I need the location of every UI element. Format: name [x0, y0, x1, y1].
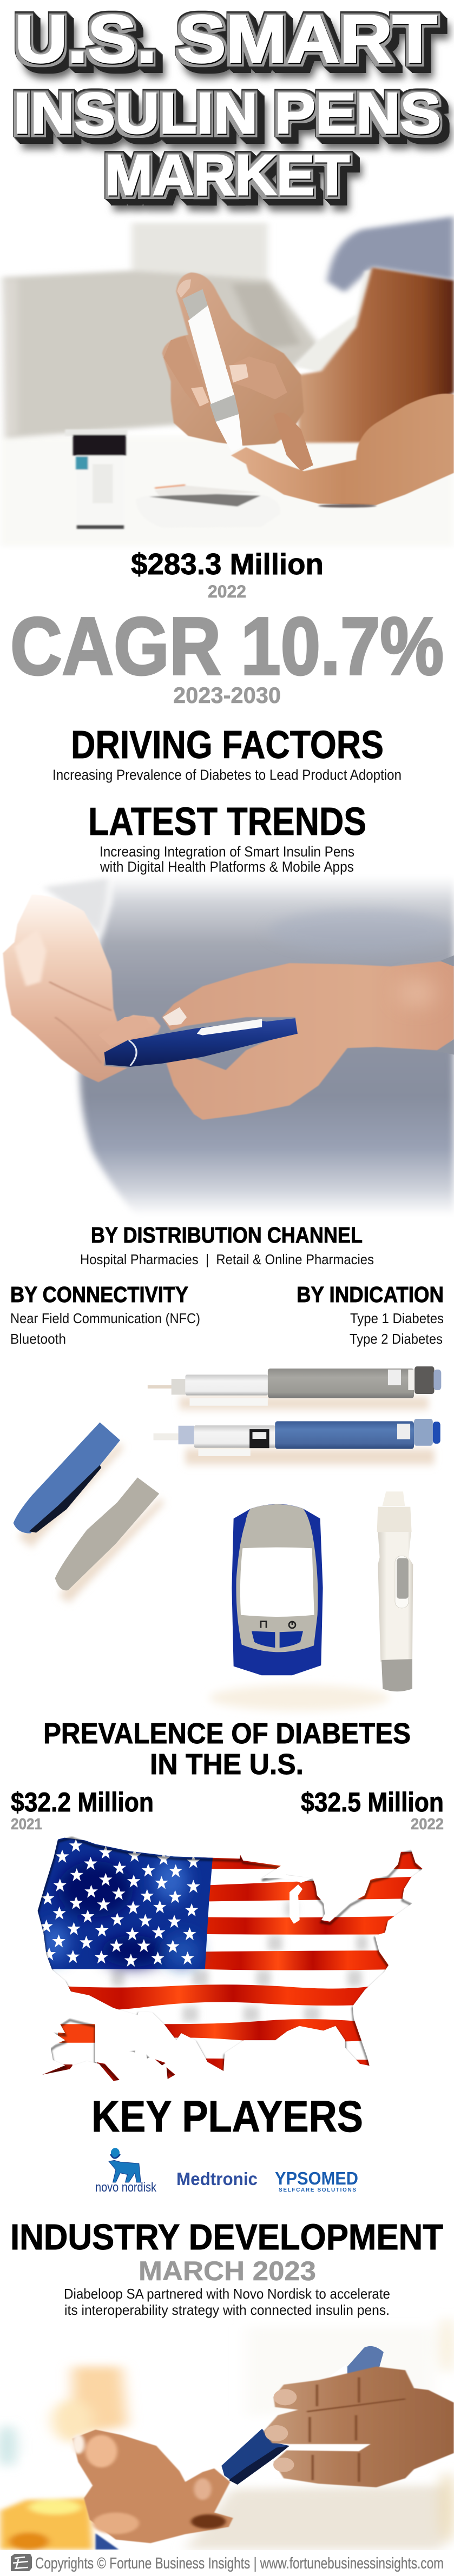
title line 1: U.S. SMART	[15, 2, 437, 77]
latest trends line 2: with Digital Health Platforms & Mobile Apps	[100, 859, 354, 875]
grey pen cap	[55, 1477, 159, 1590]
blue pen cap	[14, 1422, 120, 1533]
map: USA with flag fill	[29, 1833, 429, 2083]
blue insulin pen	[154, 1419, 440, 1456]
driving factors	[52, 723, 402, 783]
development text line 2: its interoperability strategy with connected insulin pens.	[64, 2302, 390, 2318]
blue pen lower	[221, 2429, 289, 2485]
lancing device	[182, 289, 242, 452]
novo nordisk bull	[109, 2148, 141, 2182]
latest trends	[88, 800, 366, 875]
forearm	[298, 268, 454, 443]
blue pen upper	[347, 2346, 384, 2375]
left hand	[3, 895, 161, 1082]
logo: Ypsomed	[275, 2168, 358, 2193]
meter buttons	[252, 1631, 303, 1648]
year 2022: 2022	[411, 1816, 444, 1833]
blue jeans	[96, 2533, 119, 2550]
test strip vial	[65, 429, 127, 529]
title	[14, 2, 441, 207]
driving factors text: Increasing Prevalence of Diabetes to Lead Product Adoption	[52, 767, 402, 783]
shirt tone right	[269, 909, 454, 953]
logo: novo nordisk	[95, 2148, 157, 2195]
prevalence line 1: PREVALENCE OF DIABETES	[43, 1717, 411, 1750]
prevalence 2021	[11, 1787, 154, 1833]
market value year: 2022	[208, 582, 246, 601]
flag stripes and canton	[29, 1833, 429, 2083]
connectivity item NFC: Near Field Communication (NFC)	[10, 1310, 200, 1326]
development text line 1: Diabeloop SA partnered with Novo Nordisk to accelerate	[64, 2286, 390, 2302]
left hand highlights	[72, 2434, 226, 2534]
lancing device	[377, 1491, 413, 1691]
left fingertip	[98, 1016, 150, 1046]
warm shadow	[209, 1685, 390, 1710]
footer	[11, 2554, 444, 2572]
distribution heading: BY DISTRIBUTION CHANNEL	[91, 1223, 363, 1247]
pen lower shade	[229, 2446, 289, 2485]
Ypsomed name: YPSOMED	[275, 2168, 358, 2188]
thumbnail	[163, 1007, 187, 1026]
meter screen	[240, 1548, 314, 1617]
key players heading: KEY PLAYERS	[91, 2092, 363, 2141]
photo: hands holding blue insulin pen	[3, 872, 454, 1216]
CAGR period: 2023-2030	[173, 682, 281, 708]
product photo: pens and caps	[14, 1366, 441, 1602]
upper hand	[162, 273, 304, 446]
Ypsomed tagline: SELFCARE SOLUTIONS	[279, 2187, 356, 2193]
right cuff	[437, 955, 454, 1054]
year 2021: 2021	[11, 1816, 42, 1833]
logo: Medtronic: Medtronic	[176, 2169, 258, 2189]
raised finger	[274, 413, 313, 471]
blurred background	[0, 2316, 454, 2550]
market value: $283.3 Million	[131, 547, 324, 581]
by indication	[297, 1282, 444, 1347]
distribution items: Hospital Pharmacies | Retail & Online Pharmacies	[80, 1251, 374, 1267]
title line 2: INSULIN PENS	[14, 81, 441, 145]
soft shadows	[17, 1397, 434, 1602]
finger creases	[307, 2378, 405, 2482]
market size 2022	[131, 547, 324, 601]
by connectivity	[10, 1282, 200, 1347]
wrist highlight	[399, 978, 434, 1008]
prevalence line 2: IN THE U.S.	[150, 1748, 304, 1781]
meter icons	[261, 1622, 295, 1628]
blue insulin pen	[104, 1018, 298, 1067]
latest trends heading: LATEST TRENDS	[88, 800, 366, 844]
fingers over device	[163, 280, 287, 410]
novo nordisk name: novo nordisk	[95, 2180, 157, 2195]
great lakes cut-outs	[262, 1867, 313, 1924]
CAGR	[10, 600, 444, 708]
left hand	[73, 2429, 233, 2543]
photo: hands using blue pen	[0, 2316, 454, 2551]
grey insulin pen	[148, 1366, 441, 1406]
grey shirt	[80, 872, 454, 1216]
hand shadow	[318, 504, 376, 508]
prevalence 2022	[301, 1787, 444, 1833]
white block	[24, 2456, 80, 2494]
right hand	[264, 2367, 454, 2487]
indication item type 2: Type 2 Diabetes	[350, 1331, 443, 1347]
table	[0, 436, 454, 546]
driving factors heading: DRIVING FACTORS	[71, 723, 384, 767]
white sleeve edge	[295, 271, 373, 373]
fingertips	[265, 2389, 297, 2472]
indication item type 1: Type 1 Diabetes	[350, 1310, 444, 1326]
connectivity item Bluetooth: Bluetooth	[10, 1331, 66, 1347]
palm crease	[49, 982, 111, 1064]
prevalence heading	[43, 1717, 411, 1781]
footer white band	[0, 2550, 454, 2576]
latest trends line 1: Increasing Integration of Smart Insulin Pens	[100, 844, 354, 860]
development date: MARCH 2023	[139, 2256, 316, 2286]
right arm and hand	[162, 961, 454, 1120]
title line 3: MARKET	[105, 143, 350, 207]
white pen section	[324, 2365, 348, 2381]
connectivity heading: BY CONNECTIVITY	[10, 1282, 188, 1307]
sofa backdrop	[2, 223, 318, 438]
value 2021: $32.2 Million	[11, 1787, 154, 1817]
by distribution channel	[80, 1223, 374, 1267]
shirt sleeve	[327, 216, 454, 293]
glucose meter	[232, 1504, 323, 1675]
product photo: meter and lancet	[209, 1491, 413, 1710]
left thumb highlight	[15, 929, 47, 986]
photo: hands using lancing device	[0, 216, 454, 546]
logos	[95, 2148, 358, 2195]
bottom-left orange object	[0, 2498, 93, 2551]
industry development	[10, 2217, 443, 2318]
sleeve	[43, 878, 109, 935]
footer logo	[11, 2554, 32, 2571]
glucose meter	[136, 485, 280, 528]
lower hand	[231, 394, 454, 505]
